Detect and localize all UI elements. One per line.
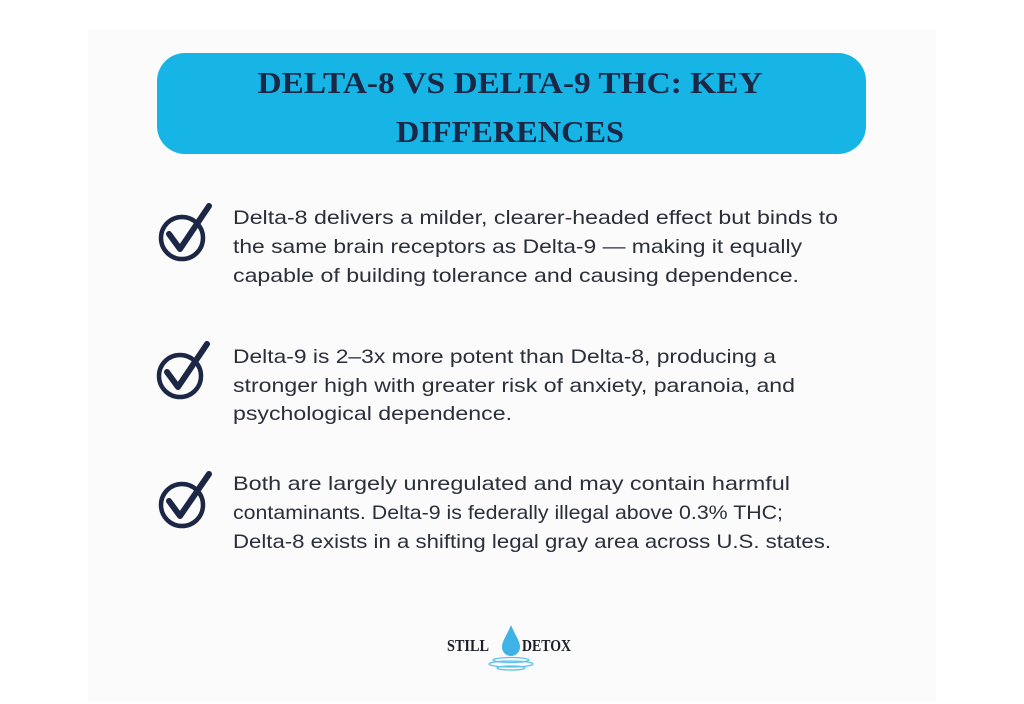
title: DELTA-8 VS DELTA-9 THC: KEY [258,65,762,100]
text 2: stronger high with greater risk of anxiety, paranoia, and [233,375,795,397]
icon: water drop [502,625,520,656]
title: DIFFERENCES [396,114,624,149]
icon: check 2 [159,344,207,397]
text 1: capable of building tolerance and causing dependence. [233,265,799,287]
text 3: Both are largely unregulated and may contain harmful [233,473,790,495]
text 1: the same brain receptors as Delta-9 — making it equally [233,236,802,258]
text 2: psychological dependence. [233,403,512,425]
text 3: Delta-8 exists in a shifting legal gray area across U.S. states. [233,531,831,553]
logo: DETOX [522,636,572,655]
item 1 [161,206,838,287]
logo [447,625,572,670]
text 3: contaminants. Delta-9 is federally illegal above 0.3% THC; [233,502,783,524]
logo: STILL [447,636,489,655]
text 1: Delta-8 delivers a milder, clearer-headed effect but binds to [233,207,838,229]
title banner [157,53,866,154]
icon: check 1 [161,206,209,259]
item 2 [159,344,795,425]
icon: check 3 [161,474,209,526]
text 2: Delta-9 is 2–3x more potent than Delta-8, producing a [233,346,776,368]
item 3 [161,473,831,553]
